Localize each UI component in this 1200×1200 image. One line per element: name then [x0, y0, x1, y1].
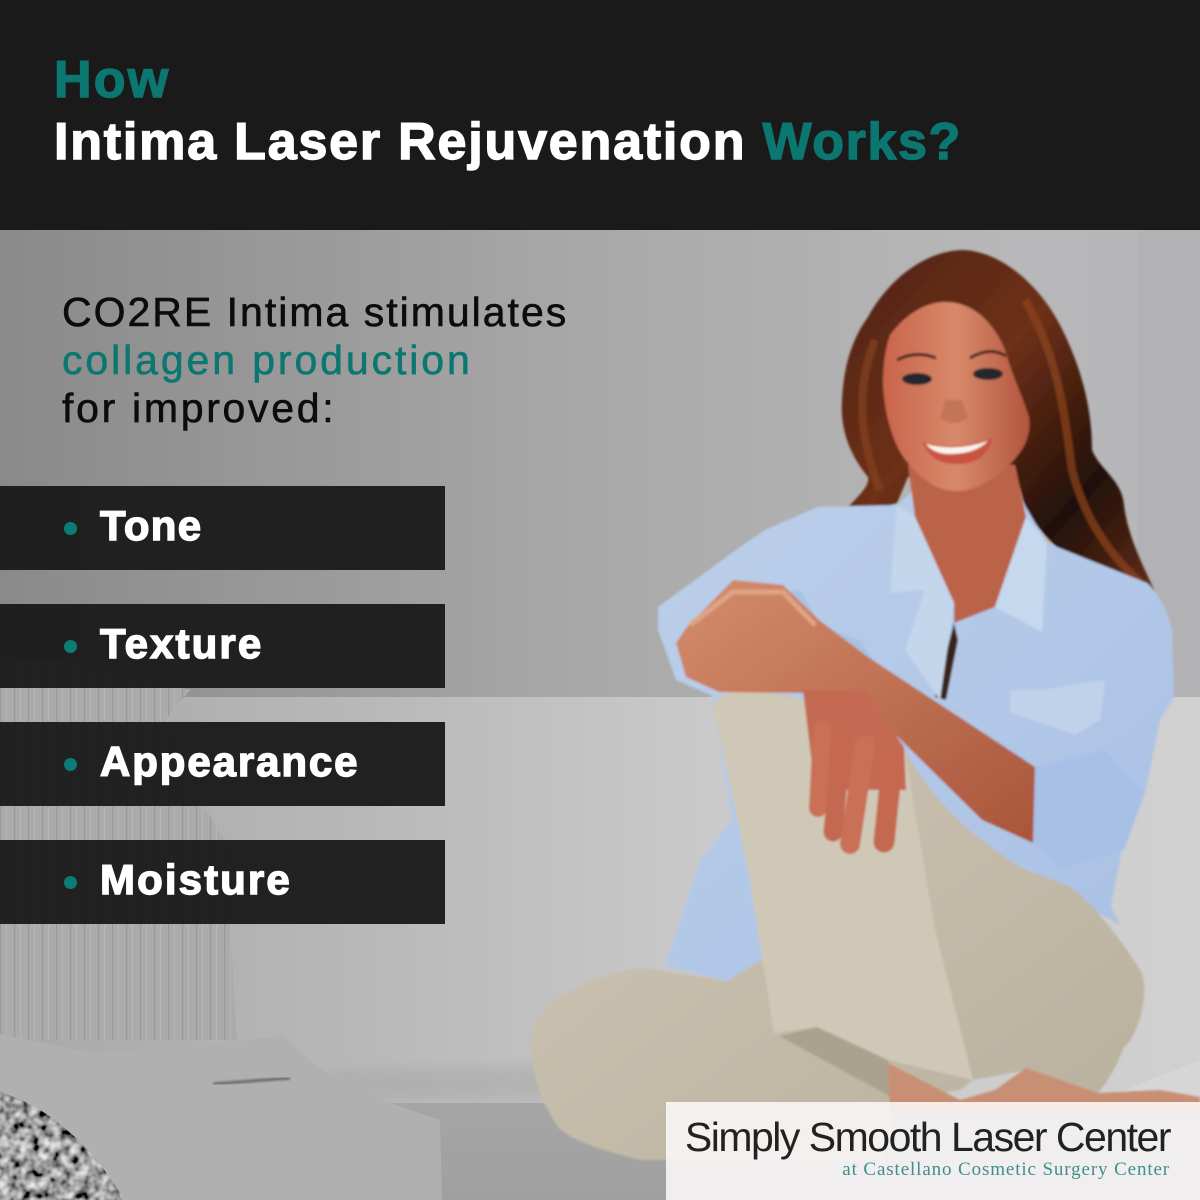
hand and fingers — [803, 690, 906, 844]
placket and collars — [890, 505, 954, 700]
intro text: collagen production — [62, 337, 473, 383]
sofa — [0, 697, 1200, 1200]
title: How — [54, 51, 170, 109]
pillow — [0, 660, 237, 1040]
pants — [531, 690, 1144, 1160]
list item: Appearance — [0, 722, 445, 806]
header band — [0, 0, 1200, 230]
list item: Moisture — [0, 840, 445, 924]
list item: Texture: Texture — [100, 620, 263, 667]
title: Intima Laser Rejuvenation Works? — [54, 113, 962, 171]
logo panel — [666, 1102, 1200, 1200]
blanket — [0, 1034, 442, 1200]
leopard cushion — [0, 1092, 125, 1200]
intro text: CO2RE Intima stimulates — [62, 289, 568, 335]
shirt interior shadow — [935, 623, 958, 700]
list item: Tone: Tone — [100, 502, 202, 549]
trouser hem shadow — [779, 1027, 895, 1100]
shirt back and sleeves — [658, 480, 1174, 981]
list item: Moisture: Moisture — [100, 856, 292, 903]
intro text — [62, 289, 568, 431]
logo tagline: at Castellano Cosmetic Surgery Center — [842, 1159, 1170, 1180]
neck and chest — [908, 465, 1026, 623]
title — [54, 51, 962, 171]
intro text: for improved: — [62, 385, 336, 431]
list item: Texture — [0, 604, 445, 688]
hair — [842, 250, 1162, 607]
front trouser leg — [714, 690, 973, 1080]
logo name: Simply Smooth Laser Center — [685, 1114, 1170, 1160]
list item: Appearance: Appearance — [100, 738, 359, 785]
list item: Tone — [0, 486, 445, 570]
face — [883, 302, 1029, 491]
forearm — [676, 580, 1035, 843]
feet — [888, 1063, 1200, 1115]
